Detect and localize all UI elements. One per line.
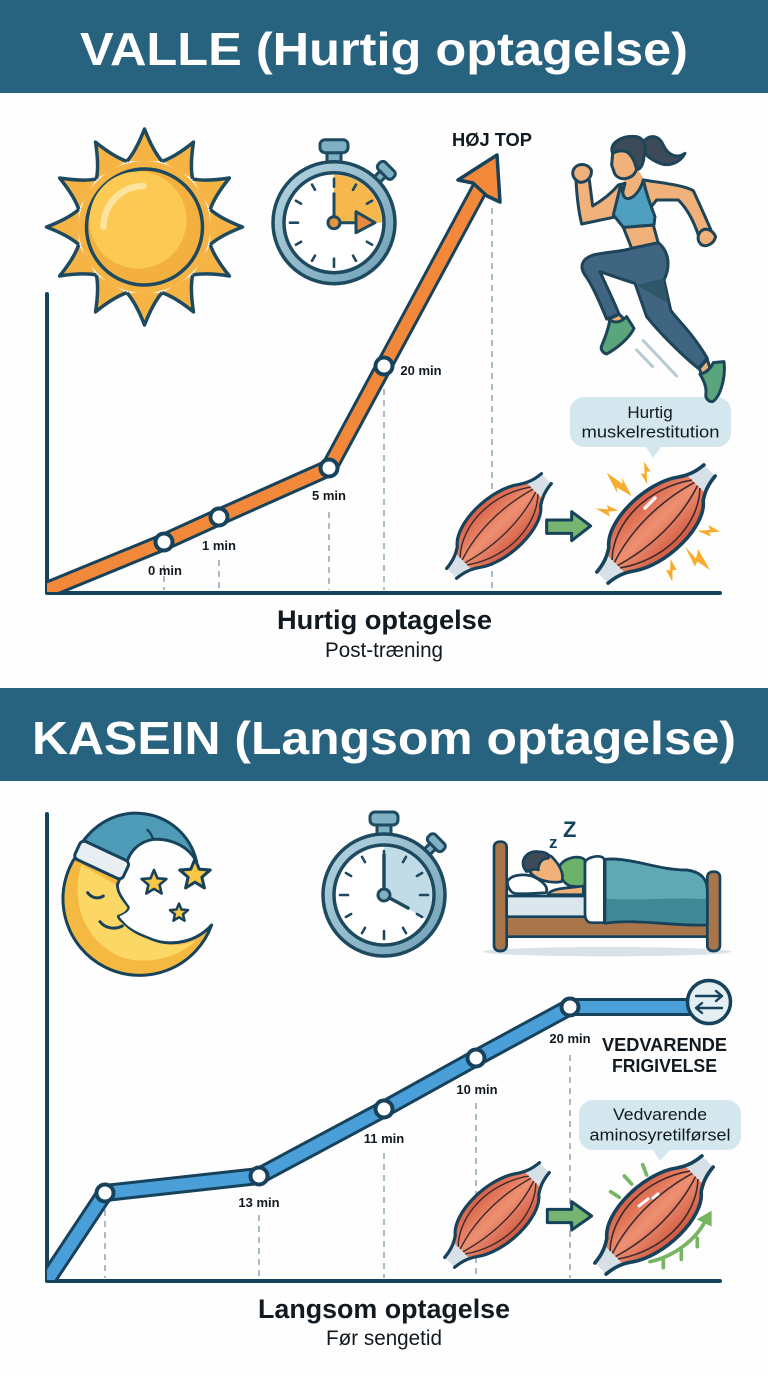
title: kasein: KASEIN (Langsom optagelse) [32, 712, 736, 764]
chart: fast absorption [30, 155, 720, 597]
label: sustained release: VEDVARENDE [602, 1034, 727, 1055]
callout: fast recovery [570, 397, 731, 458]
header band: kasein [0, 688, 768, 781]
slow absorption line [40, 1007, 700, 1291]
callout: sustained amino acids: Vedvarende [613, 1105, 707, 1124]
icon: sustained release circle [688, 980, 730, 1024]
chart: slow absorption [40, 814, 730, 1291]
sleep letters [549, 817, 576, 852]
caption: slow: Langsom optagelse [258, 1294, 510, 1324]
time labels: 1 min [202, 538, 236, 553]
caption: fast: Post-træning [325, 639, 443, 662]
time labels [238, 1031, 591, 1210]
sleep letters: z [549, 833, 558, 852]
label: sustained release [602, 1034, 727, 1076]
arrow head [458, 155, 500, 202]
callout: fast recovery: muskelrestitution [582, 422, 720, 442]
caption: slow: Før sengetid [326, 1327, 442, 1350]
label: sustained release: FRIGIVELSE [612, 1055, 717, 1076]
time labels: 5 min [312, 488, 346, 503]
y axis and x axis [47, 294, 720, 593]
icon: stopwatch fast [273, 140, 397, 284]
icon: moon with nightcap [63, 813, 212, 975]
data points [156, 358, 392, 550]
icon: runner [573, 136, 724, 402]
callout: sustained amino acids [579, 1100, 741, 1161]
time labels: 20 min [400, 363, 442, 378]
caption: slow [258, 1294, 510, 1350]
time labels: 13 min [238, 1195, 280, 1210]
header band: valle [0, 0, 768, 93]
icon: person sleeping in bed [483, 842, 731, 956]
arrow: green [547, 512, 591, 541]
icon: big muscle with sparks [580, 448, 732, 600]
icon: stopwatch slow [323, 812, 447, 956]
icon: stars [142, 859, 210, 921]
peak label: HØJ TOP [452, 130, 532, 150]
sleep letters: Z [563, 817, 576, 842]
icon: small muscle slow [429, 1147, 565, 1283]
caption: fast: Hurtig optagelse [277, 605, 492, 635]
time labels [148, 363, 442, 578]
caption: fast [277, 605, 492, 662]
icon: big muscle with growth arrow [578, 1139, 730, 1291]
time labels: 11 min [364, 1131, 404, 1146]
time labels: 0 min [148, 563, 182, 578]
callout: sustained amino acids: aminosyretilførsel [590, 1126, 730, 1144]
fast absorption line [30, 188, 480, 597]
icon: small muscle [431, 458, 567, 594]
data points [96, 998, 578, 1202]
icon: sun [46, 129, 242, 325]
axes [47, 814, 720, 1281]
arrow: green slow [547, 1202, 592, 1230]
time labels: 20 min [549, 1031, 591, 1046]
time labels: 10 min [456, 1082, 498, 1097]
title: valle: VALLE (Hurtig optagelse) [80, 23, 688, 75]
callout: fast recovery: Hurtig [627, 403, 673, 422]
